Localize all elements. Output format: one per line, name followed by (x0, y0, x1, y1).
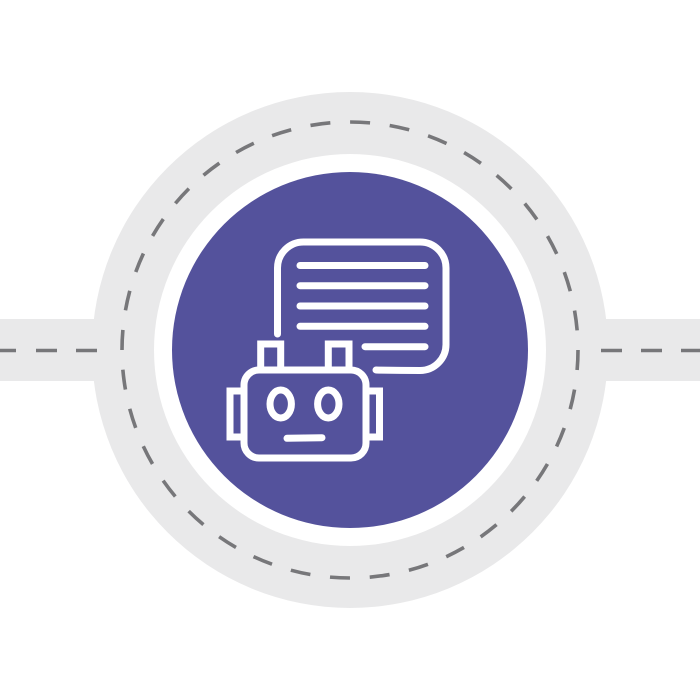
icon: robot mouth (287, 434, 322, 442)
icon: speech bubble text lines (300, 266, 425, 347)
center disc (172, 172, 528, 528)
icon: robot ears (230, 391, 380, 437)
road markings: left dashes (0, 349, 97, 352)
road: circular ring (92, 92, 608, 608)
icon: robot left eye (270, 390, 291, 418)
icon: robot right eye (318, 390, 339, 418)
icon: speech bubble outline (278, 242, 446, 370)
icon: robot head (244, 370, 366, 458)
road markings: ring dashes (122, 122, 578, 578)
road markings: right dashes (601, 349, 700, 352)
icon: robot antennas (261, 344, 349, 370)
road: horizontal band (0, 319, 700, 381)
icon: chatbot with speech bubble (230, 242, 446, 458)
white gap inside ring (154, 154, 546, 546)
